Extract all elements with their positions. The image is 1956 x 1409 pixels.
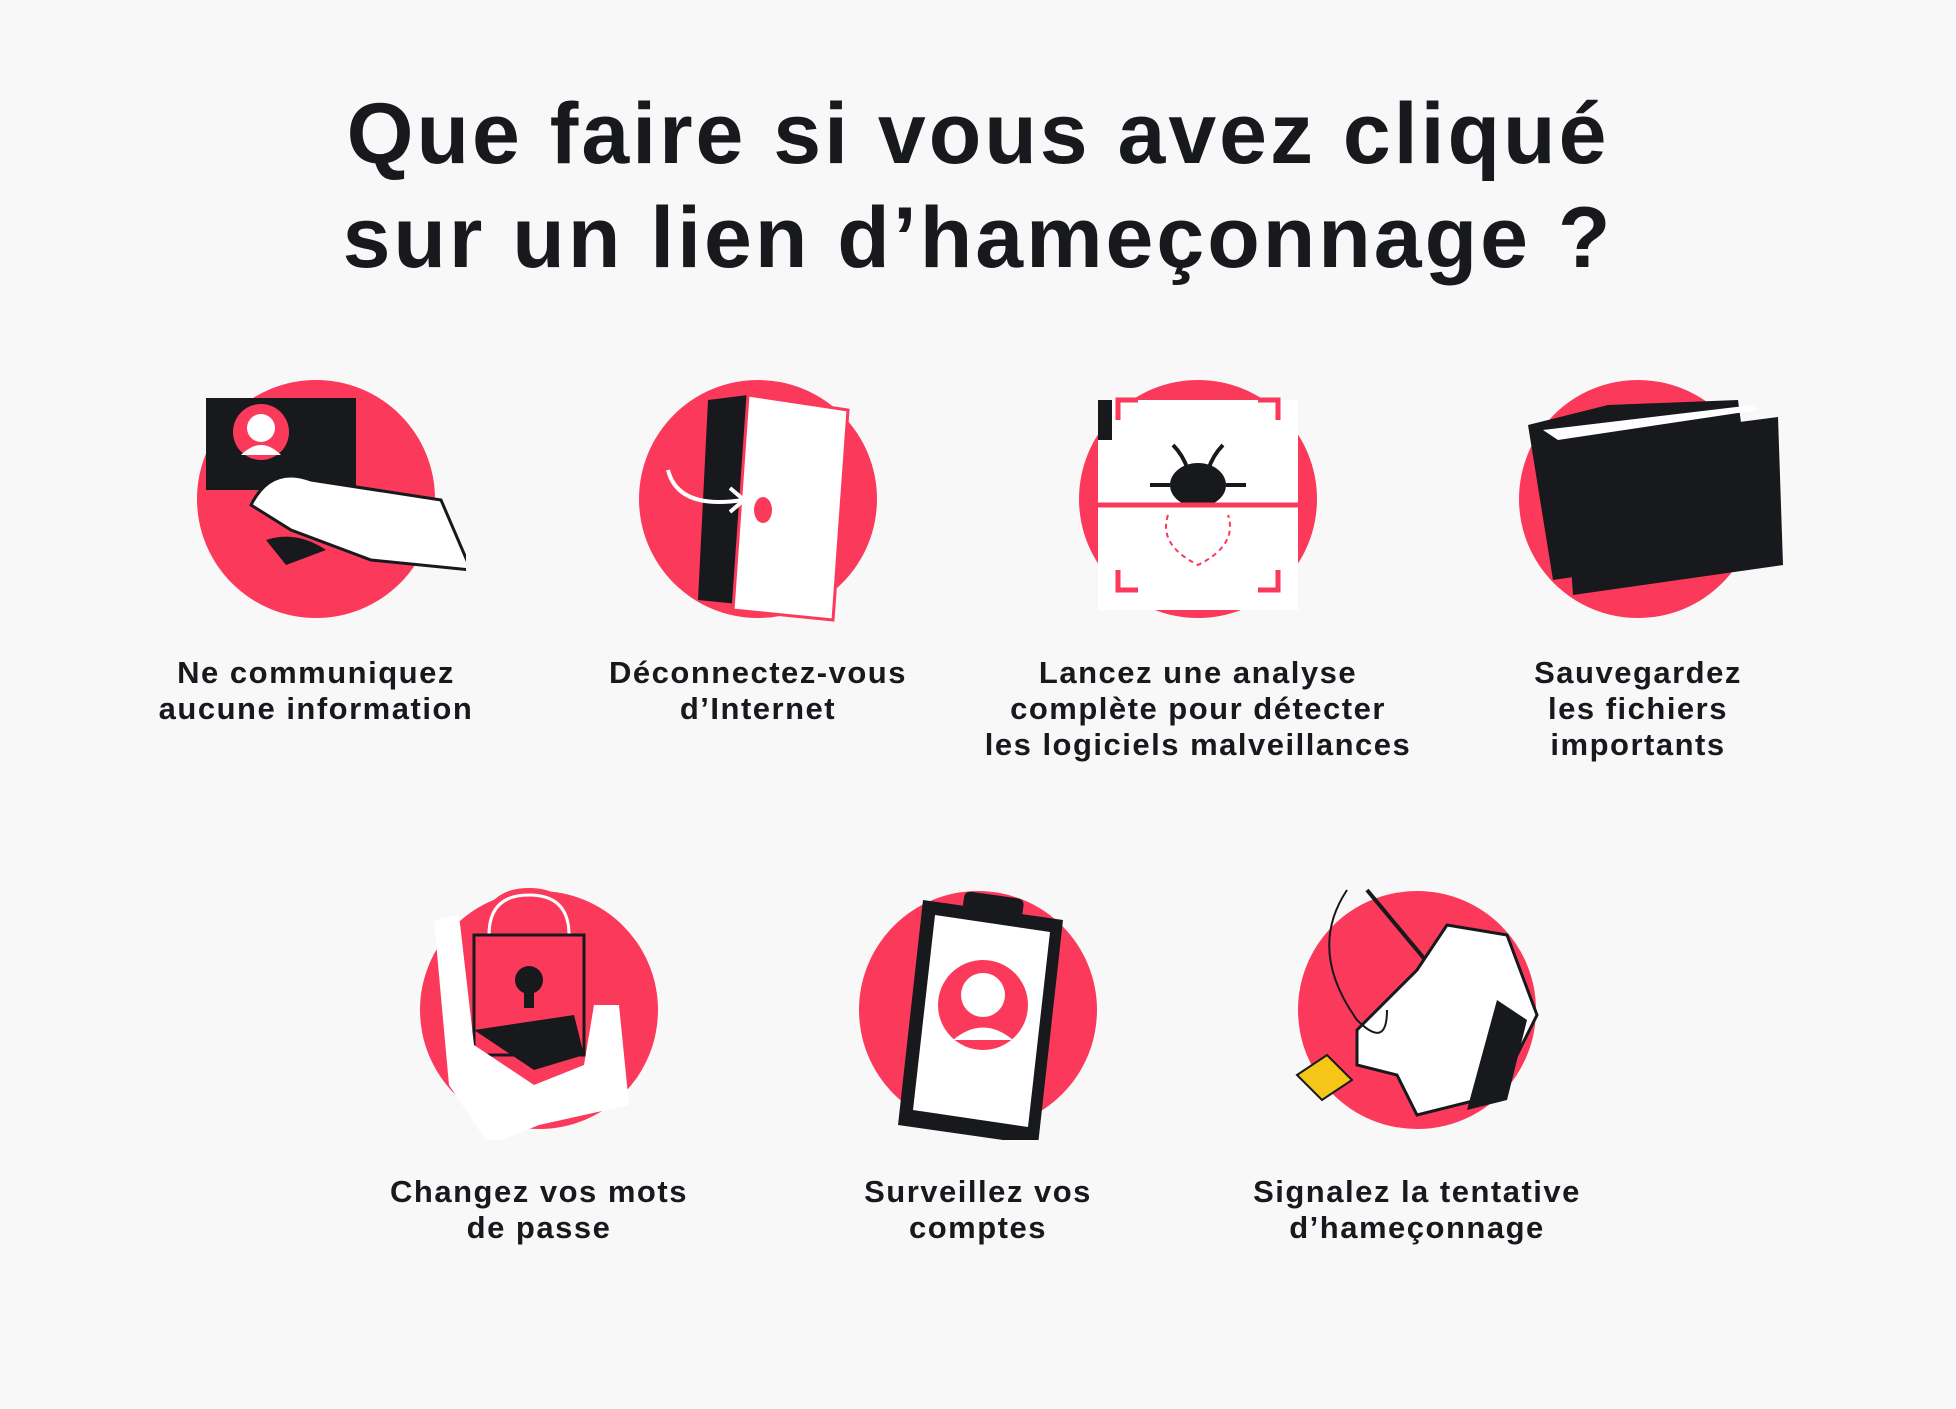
label: les logiciels malveillances	[985, 727, 1411, 762]
title	[343, 86, 1613, 286]
icon: door	[639, 380, 877, 622]
panel: changez vos mots de passe	[390, 888, 688, 1245]
label: d’Internet	[680, 691, 836, 726]
panel: surveillez vos comptes	[859, 891, 1097, 1245]
label: comptes	[909, 1210, 1047, 1245]
panel: signalez la tentative	[1253, 888, 1581, 1245]
label: de passe	[467, 1210, 611, 1245]
panel: sauvegardez	[1519, 380, 1783, 762]
icon: hand with envelope	[1296, 888, 1539, 1129]
label	[390, 1174, 688, 1245]
icon: hand with padlock	[420, 888, 658, 1129]
panel: ne communiquez aucune information	[159, 380, 473, 726]
title: sur un lien d’hameçonnage ?	[343, 190, 1613, 286]
icon: folders	[1519, 380, 1783, 618]
label	[1534, 655, 1742, 762]
label: Lancez une analyse	[1039, 655, 1357, 690]
icon: bug scan	[1079, 380, 1317, 618]
label	[864, 1174, 1092, 1245]
label: Surveillez vos	[864, 1174, 1092, 1209]
icon: hand holding ID card	[197, 380, 466, 618]
label: complète pour détecter	[1010, 691, 1386, 726]
label: Sauvegardez	[1534, 655, 1742, 690]
label	[1253, 1174, 1581, 1245]
label: Déconnectez-vous	[609, 655, 907, 690]
icon: clipboard	[859, 891, 1097, 1140]
label: Ne communiquez	[177, 655, 455, 690]
title: Que faire si vous avez cliqué	[347, 86, 1609, 182]
label: Changez vos mots	[390, 1174, 688, 1209]
label: aucune information	[159, 691, 473, 726]
label: importants	[1550, 727, 1726, 762]
label: les fichiers	[1548, 691, 1728, 726]
label: Signalez la tentative	[1253, 1174, 1581, 1209]
label	[159, 655, 473, 726]
panel: déconnectez-vous	[609, 380, 907, 726]
label	[609, 655, 907, 726]
panel: lancez une analyse	[985, 380, 1411, 762]
label: d’hameçonnage	[1289, 1210, 1545, 1245]
label	[985, 655, 1411, 762]
